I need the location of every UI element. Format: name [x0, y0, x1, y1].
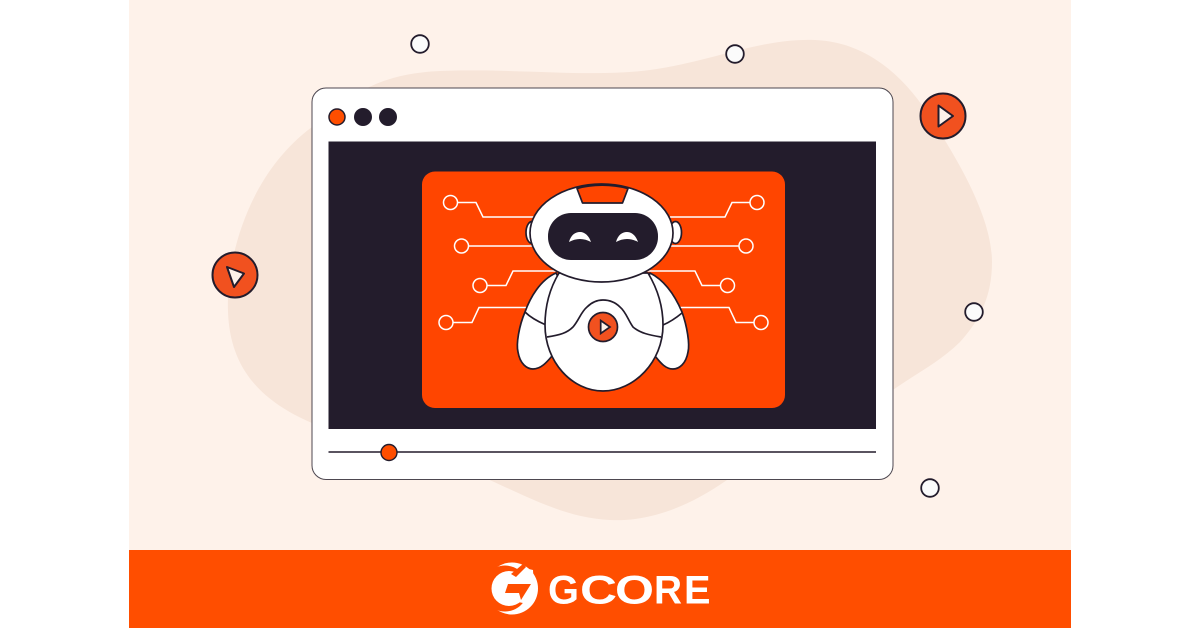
logo wordmark [548, 568, 710, 612]
robot arm seams [525, 312, 682, 325]
logo wordmark: E [684, 568, 710, 612]
circuit lines left [439, 196, 565, 330]
progress handle [381, 444, 397, 460]
panel: orange video frame [422, 172, 785, 408]
panel: browser window [312, 88, 893, 480]
icon: cursor button left [212, 252, 258, 298]
progress bar [328, 444, 876, 460]
robot right eye [616, 232, 638, 242]
decorative circle bottom right [921, 479, 939, 497]
icon: play button right [920, 94, 966, 138]
decorative circle right [965, 303, 983, 321]
robot right arm [640, 273, 689, 369]
logo wordmark: O [615, 568, 654, 612]
robot chest play button [588, 312, 618, 342]
robot left arm [517, 273, 570, 369]
logo wordmark: R [654, 568, 682, 612]
logo wordmark: C [580, 568, 617, 612]
decorative circle top left [411, 35, 429, 53]
robot head [530, 184, 673, 282]
robot visor [548, 213, 658, 260]
logo mark [482, 562, 538, 614]
window control: dark dot one [354, 108, 372, 126]
robot body [545, 273, 663, 391]
robot right ear [670, 222, 682, 244]
window control: orange dot [329, 109, 345, 125]
robot [517, 184, 689, 391]
video area [328, 142, 876, 429]
robot chest band [547, 300, 661, 337]
decorative circle top right [726, 45, 744, 63]
robot left eye [569, 232, 591, 242]
footer band [129, 550, 1071, 628]
logo [482, 562, 710, 614]
logo wordmark: G [548, 568, 579, 612]
circuit lines right [645, 196, 768, 330]
background blob [228, 40, 992, 520]
window control: dark dot two [379, 108, 397, 126]
robot left ear [526, 222, 538, 244]
robot head top panel [577, 185, 628, 203]
